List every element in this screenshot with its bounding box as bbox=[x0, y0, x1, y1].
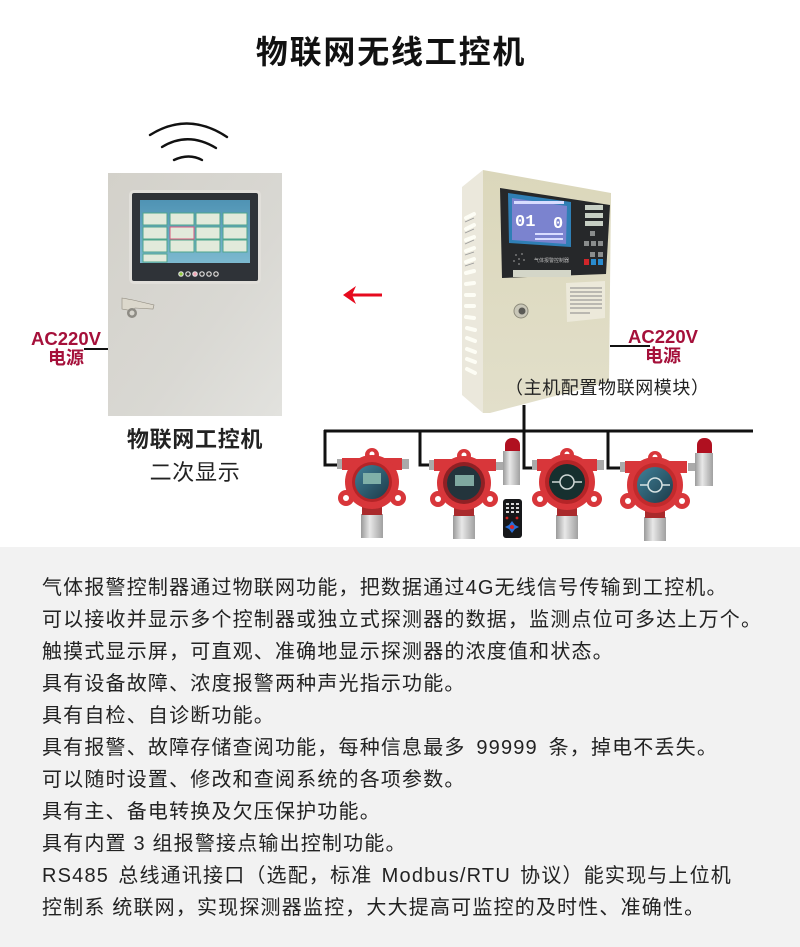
text block: feature list: 具有自检、自诊断功能。 bbox=[42, 705, 275, 727]
caption: IoT industrial computer: 物联网工控机 bbox=[127, 427, 263, 452]
alarm beacon 2 bbox=[688, 438, 713, 486]
diagram: devices and wiring bbox=[84, 122, 753, 541]
device: IoT industrial computer cabinet bbox=[108, 173, 282, 416]
vents bbox=[466, 214, 475, 373]
arrow: data direction bbox=[343, 286, 382, 304]
text block: feature list: 具有报警、故障存储查阅功能，每种信息最多 99999 条，掉电不丢失。 bbox=[42, 737, 718, 759]
device: gas alarm controller: 0 bbox=[553, 215, 563, 234]
power wire: right bbox=[610, 345, 650, 347]
device: gas alarm controller: 气体报警控制器 bbox=[534, 257, 569, 264]
title: 物联网无线工控机 bbox=[256, 34, 526, 70]
caption: secondary display: 二次显示 bbox=[150, 460, 240, 485]
icon: wireless signal bbox=[150, 123, 227, 160]
text block: feature list: 气体报警控制器通过物联网功能，把数据通过4G无线信号传输到工控机。 bbox=[42, 577, 728, 599]
label: right AC220V power: AC220V bbox=[628, 326, 698, 347]
text block: feature list: RS485 总线通讯接口（选配，标准 Modbus/RTU 协议）能实现与上位机 bbox=[42, 865, 732, 887]
device: gas alarm controller bbox=[462, 170, 611, 413]
label: left power source: 电源 bbox=[48, 348, 84, 368]
label: left AC220V power: AC220V bbox=[31, 328, 101, 349]
text block: feature list: 可以随时设置、修改和查阅系统的各项参数。 bbox=[42, 769, 466, 791]
icon: key and lock bbox=[122, 298, 154, 318]
panel: feature description bbox=[0, 547, 800, 947]
text block: feature list: 可以接收并显示多个控制器或独立式探测器的数据，监测点位可多达上万个。 bbox=[42, 609, 762, 631]
detector 3 bbox=[532, 448, 604, 539]
bus wiring bbox=[324, 405, 753, 468]
text block: feature list: 控制系 统联网，实现探测器监控，大大提高可监控的及时性、准确性。 bbox=[42, 897, 705, 919]
power wire: left bbox=[84, 348, 108, 350]
text block: feature list bbox=[42, 577, 762, 919]
detector 4 bbox=[620, 451, 690, 541]
text block: feature list: 具有内置 3 组报警接点输出控制功能。 bbox=[42, 833, 407, 855]
text block: feature list: 触摸式显示屏，可直观、准确地显示探测器的浓度值和状态。 bbox=[42, 641, 614, 663]
detector 2 bbox=[429, 449, 498, 539]
alarm beacon 1 bbox=[496, 438, 520, 485]
icon: remote control bbox=[503, 499, 522, 538]
caption: host with IoT module: （主机配置物联网模块） bbox=[505, 378, 710, 398]
detector 1 bbox=[337, 448, 409, 538]
text block: feature list: 具有设备故障、浓度报警两种声光指示功能。 bbox=[42, 673, 466, 695]
label: right power source: 电源 bbox=[645, 346, 681, 366]
device: gas alarm controller: 01 bbox=[515, 213, 535, 232]
text block: feature list: 具有主、备电转换及欠压保护功能。 bbox=[42, 801, 381, 823]
